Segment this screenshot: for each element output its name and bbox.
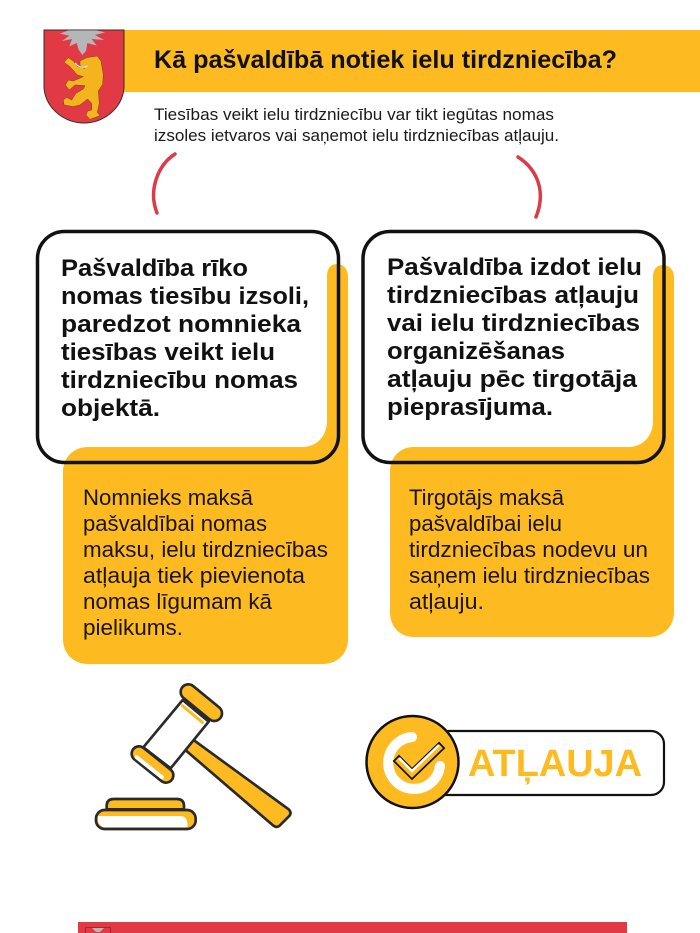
- panel: right yellow card: [390, 265, 674, 637]
- icon: grey sun: [60, 30, 105, 55]
- gavel head: [143, 700, 209, 768]
- white ring: [388, 737, 440, 789]
- arrow: left red arc: [154, 154, 175, 213]
- panel: left outlined box: [38, 232, 338, 462]
- icon: small coat of arms: [86, 928, 110, 933]
- icon: coat of arms: [44, 30, 124, 123]
- heading: auction: paredzot nomnieka: [61, 311, 302, 338]
- text: trader fee: saņem ielu tirdzniecības: [409, 563, 650, 588]
- gavel handle: [185, 739, 290, 827]
- text: rent payment: atļauja tiek pievienota: [83, 563, 306, 588]
- gavel bottom cap: [139, 754, 166, 775]
- text: trader fee: tirdzniecības nodevu un: [409, 537, 648, 562]
- text: rent payment: pielikums.: [83, 615, 183, 640]
- heading: permit: organizēšanas: [387, 338, 565, 365]
- gavel base: [107, 799, 184, 809]
- text: rent payment: maksu, ielu tirdzniecības: [83, 537, 328, 562]
- arrow: right red arc: [518, 157, 540, 217]
- text: rent payment: Nomnieks maksā: [83, 485, 254, 510]
- intro text: izsoles ietvaros vai saņemot ielu tirdzniecības atļauju.: [154, 127, 559, 145]
- text: rent payment: pašvaldībai nomas: [83, 511, 267, 536]
- text: rent payment: nomas līgumam kā: [83, 589, 273, 614]
- title banner: [124, 30, 700, 92]
- heading: permit: vai ielu tirdzniecības: [387, 310, 640, 337]
- heading: auction: nomas tiesību izsoli,: [61, 283, 309, 310]
- badge circle: [366, 716, 458, 808]
- badge label: ATĻAUJA: [468, 743, 642, 785]
- heading: auction: tirdzniecību nomas: [61, 367, 298, 394]
- icon: gavel: [96, 692, 290, 829]
- text: trader fee: atļauju.: [409, 589, 484, 614]
- text: trader fee: [409, 485, 650, 614]
- intro text: Tiesības veikt ielu tirdzniecību var tikt iegūtas nomas: [154, 106, 554, 124]
- heading: permit: Pašvaldība izdot ielu: [387, 254, 642, 281]
- text: trader fee: pašvaldībai ielu: [409, 511, 562, 536]
- heading: auction: [61, 255, 309, 422]
- text: rent payment: [83, 485, 328, 640]
- heading: permit: [387, 254, 642, 421]
- panel: left yellow card: [63, 264, 348, 664]
- heading: permit: tirdzniecības atļauju: [387, 282, 639, 309]
- title: Kā pašvaldībā notiek ielu tirdzniecība?: [154, 46, 617, 74]
- panel: right outlined box: [363, 232, 664, 462]
- icon: permit badge: [366, 716, 664, 808]
- heading: permit: atļauju pēc tirgotāja: [387, 366, 638, 393]
- heading: auction: objektā.: [61, 395, 160, 422]
- heading: auction: tiesības veikt ielu: [61, 339, 275, 366]
- gavel top cap: [188, 692, 214, 713]
- intro text: [154, 106, 559, 145]
- footer red bar: [78, 922, 627, 933]
- heading: auction: Pašvaldība rīko: [61, 255, 248, 282]
- icon: golden lion: [63, 56, 103, 119]
- heading: permit: pieprasījuma.: [387, 394, 553, 421]
- check mark: [399, 746, 439, 774]
- text: trader fee: Tirgotājs maksā: [409, 485, 565, 510]
